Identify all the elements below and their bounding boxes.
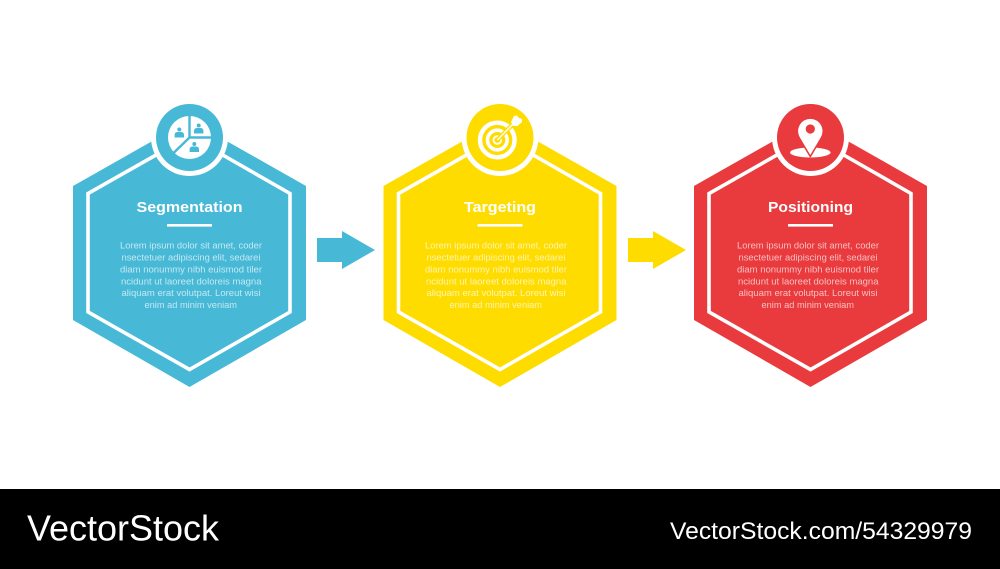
text block: positioning (737, 240, 880, 311)
text block: segmentation: nsectetuer adipiscing elit, sedarei (122, 252, 260, 264)
hexagon: positioning inner outline (709, 136, 911, 370)
hexagon: positioning outer (694, 120, 927, 387)
heading underline (167, 224, 212, 227)
icon ring: targeting (462, 99, 538, 176)
arrow: segmentation to targeting (317, 231, 375, 269)
hexagon: segmentation inner outline (88, 136, 290, 370)
text block: segmentation: diam nonummy nibh euismod tiler (120, 264, 263, 276)
panel: positioning (694, 99, 927, 387)
text block: targeting: ncidunt ut laoreet doloreis magna (426, 276, 567, 288)
icon ring: positioning (772, 99, 849, 176)
text block: targeting: aliquam erat volutpat. Loreut wisi (426, 288, 566, 299)
text block: targeting: diam nonummy nibh euismod tiler (425, 264, 568, 276)
arrow: targeting to positioning (628, 231, 686, 269)
footer url text: VectorStock.com/54329979 (670, 518, 972, 545)
text block: targeting (425, 240, 568, 311)
text block: positioning: Lorem ipsum dolor sit amet, coder (737, 240, 880, 252)
text block: segmentation (120, 240, 263, 311)
heading: positioning: Positioning (768, 200, 853, 216)
text block: targeting: Lorem ipsum dolor sit amet, coder (425, 240, 568, 252)
heading underline (478, 224, 522, 227)
text block: positioning: aliquam erat volutpat. Loreut wisi (738, 288, 878, 299)
hexagon: targeting inner outline (398, 136, 600, 370)
panel: targeting (384, 99, 616, 387)
icon: map pin (790, 118, 831, 158)
text block: segmentation: Lorem ipsum dolor sit amet, coder (120, 240, 263, 252)
footer band (0, 489, 1000, 569)
hexagon: targeting outer (384, 120, 616, 387)
text block: targeting: enim ad minim veniam (450, 300, 542, 311)
icon disc: positioning (777, 104, 844, 171)
text block: segmentation: enim ad minim veniam (144, 300, 237, 311)
heading: targeting: Targeting (464, 200, 536, 216)
icon disc: targeting (466, 104, 534, 171)
icon: target with arrow (480, 116, 522, 157)
icon: pie chart with people (168, 115, 212, 159)
icon disc: segmentation (156, 104, 223, 171)
panel: segmentation (73, 99, 306, 387)
text block: segmentation: aliquam erat volutpat. Loreut wisi (122, 288, 260, 299)
text block: positioning: enim ad minim veniam (762, 300, 854, 311)
text block: positioning: nsectetuer adipiscing elit, sedarei (738, 252, 878, 264)
text block: targeting: nsectetuer adipiscing elit, sedarei (426, 252, 566, 264)
text block: positioning: ncidunt ut laoreet doloreis magna (738, 276, 879, 288)
heading: segmentation: Segmentation (136, 200, 242, 216)
hexagon: segmentation outer (73, 120, 306, 387)
text block: positioning: diam nonummy nibh euismod tiler (737, 264, 880, 276)
footer logo text: VectorStock (27, 508, 220, 548)
icon ring: segmentation (151, 99, 228, 176)
text block: segmentation: ncidunt ut laoreet doloreis magna (121, 276, 262, 288)
heading underline (788, 224, 833, 227)
